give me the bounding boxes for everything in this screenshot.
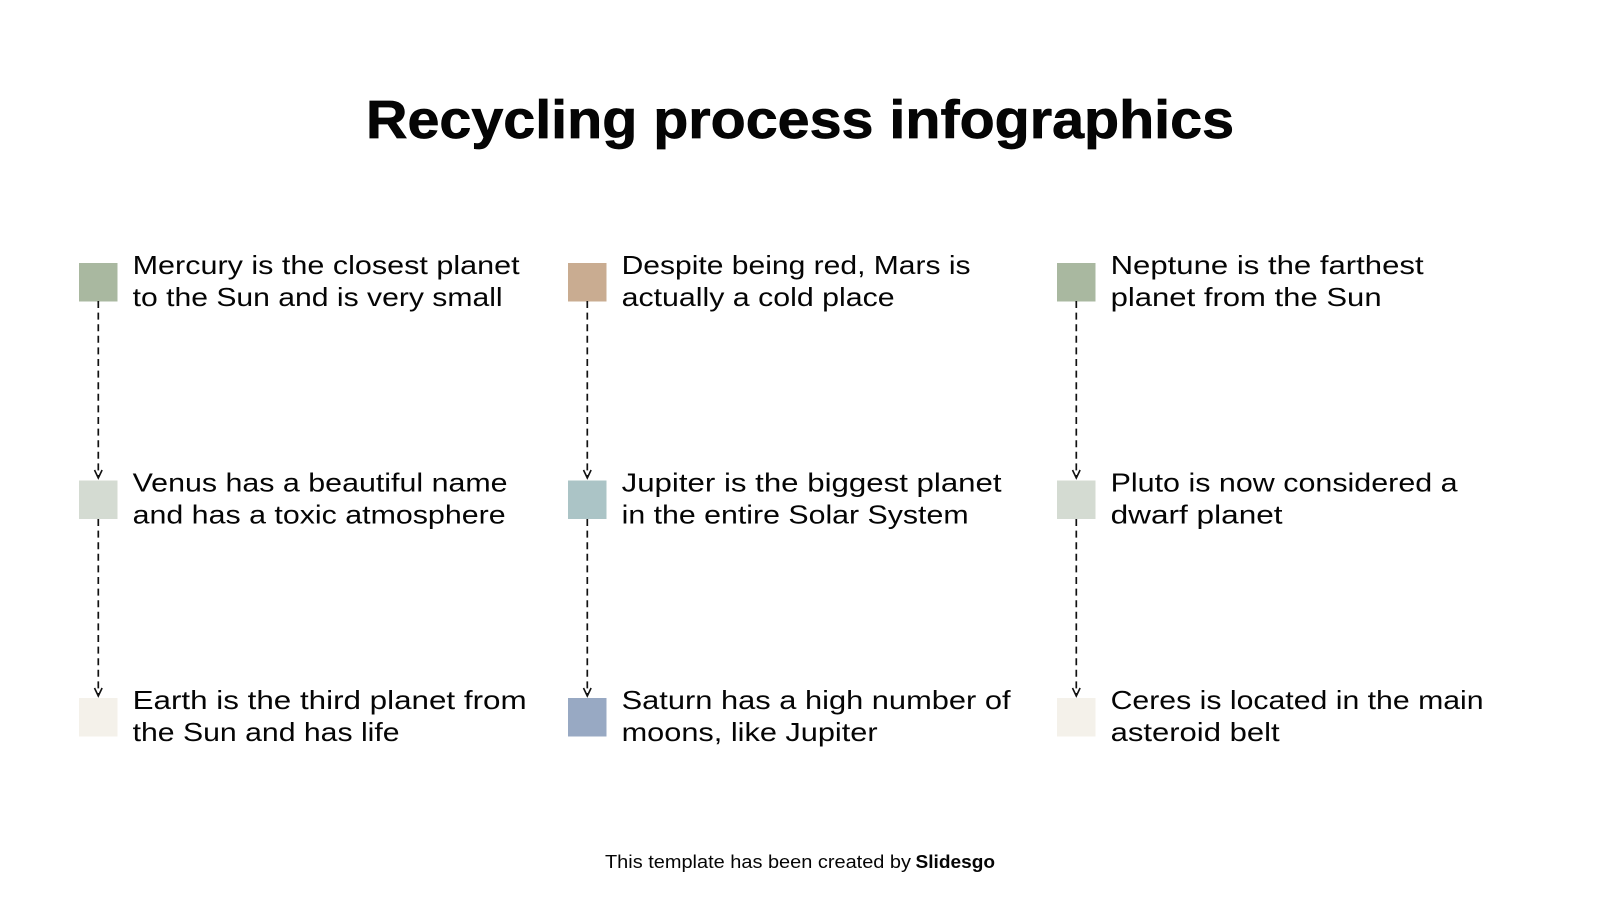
- step: Saturn: [568, 685, 1012, 747]
- step: Pluto: dwarf planet: [1111, 500, 1284, 530]
- step: Earth: the Sun and has life: [133, 717, 400, 747]
- step: Pluto: Pluto is now considered a: [1111, 468, 1458, 498]
- footer credit: Slidesgo: [916, 852, 995, 872]
- step: Venus: and has a toxic atmosphere: [133, 500, 506, 530]
- step: Mars: Despite being red, Mars is: [622, 250, 971, 280]
- footer credit: This template has been created by: [605, 852, 911, 872]
- step: Ceres: [1057, 685, 1484, 747]
- arrow: Jupiter to Saturn: [584, 519, 591, 696]
- step: Saturn: moons, like Jupiter: [622, 717, 878, 747]
- arrow: Venus to Earth: [94, 519, 102, 696]
- step: Mercury: to the Sun and is very small: [133, 282, 503, 312]
- title: Recycling process infographics: [366, 90, 1234, 150]
- step: Venus: Venus has a beautiful name: [133, 468, 508, 498]
- arrow: Pluto to Ceres: [1072, 519, 1080, 696]
- step: Earth: [79, 685, 527, 747]
- column 3: [1057, 250, 1484, 747]
- step: Mars: actually a cold place: [622, 282, 895, 312]
- step: Neptune: [1057, 250, 1425, 312]
- arrow: Mars to Jupiter: [584, 301, 591, 478]
- step: Pluto: [1057, 468, 1458, 530]
- step: Jupiter: in the entire Solar System: [622, 500, 969, 530]
- column 1: [79, 250, 527, 747]
- step: Ceres: asteroid belt: [1111, 717, 1281, 747]
- step: Saturn: Saturn has a high number of: [622, 685, 1012, 715]
- step: Mars: [568, 250, 971, 312]
- step: Neptune: planet from the Sun: [1111, 282, 1382, 312]
- step: Venus: [79, 468, 508, 530]
- column 2: [568, 250, 1012, 747]
- step: Jupiter: [568, 468, 1003, 530]
- step: Mercury: [79, 250, 521, 312]
- step: Earth: Earth is the third planet from: [133, 685, 527, 715]
- arrow: Mercury to Venus: [94, 301, 102, 478]
- step: Ceres: Ceres is located in the main: [1111, 685, 1484, 715]
- step: Mercury: Mercury is the closest planet: [133, 250, 521, 280]
- step: Jupiter: Jupiter is the biggest planet: [622, 468, 1003, 498]
- arrow: Neptune to Pluto: [1072, 301, 1080, 478]
- step: Neptune: Neptune is the farthest: [1111, 250, 1425, 280]
